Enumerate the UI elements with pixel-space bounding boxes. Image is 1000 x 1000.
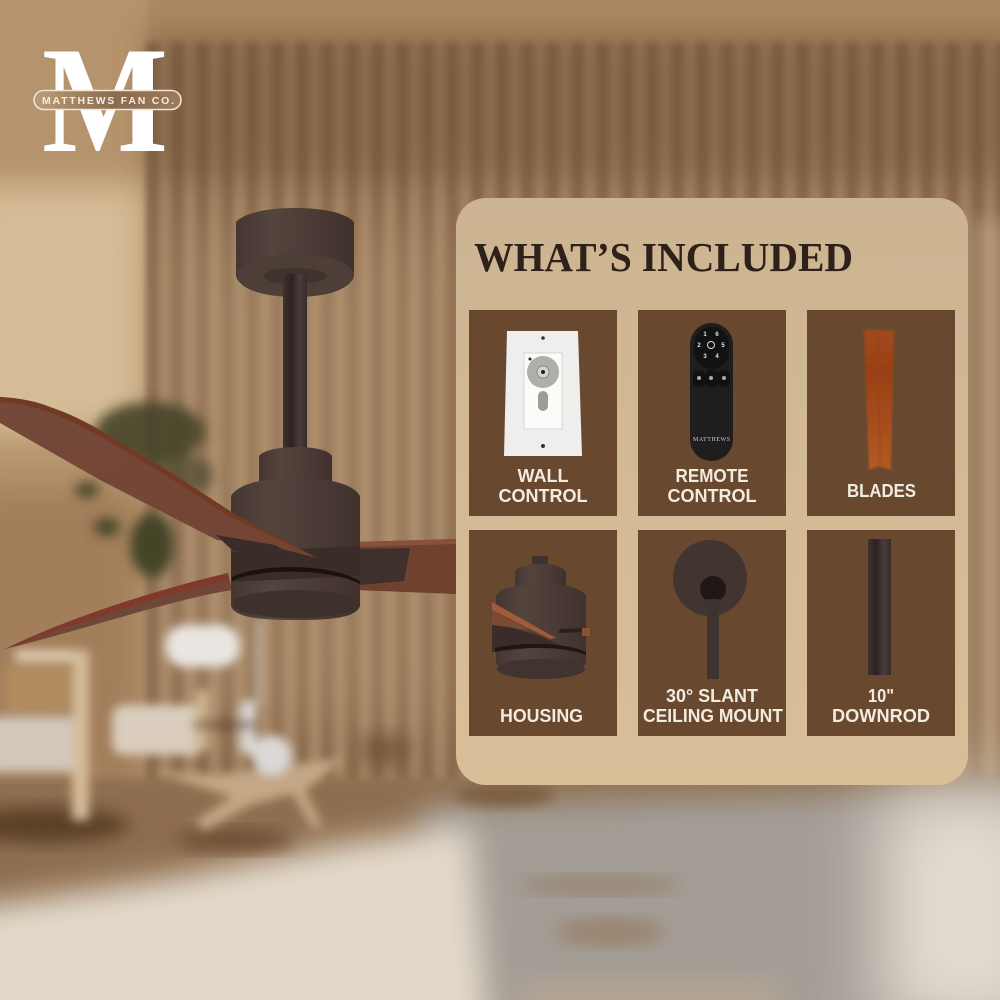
card: wall control bbox=[469, 310, 617, 516]
card: remote control bbox=[638, 310, 786, 516]
card: remote control: CONTROL bbox=[668, 486, 756, 506]
icon: remote bbox=[690, 323, 733, 461]
icon: remote: 3 bbox=[703, 354, 707, 360]
heading: WHAT’S INCLUDED bbox=[474, 234, 853, 280]
label: 10" bbox=[868, 686, 894, 706]
icon: remote: 5 bbox=[721, 343, 725, 349]
label: 30° SLANT bbox=[666, 686, 758, 706]
fan blade: right bbox=[355, 539, 456, 594]
icon: remote: 2 bbox=[697, 343, 701, 349]
icon: blade bbox=[864, 330, 894, 470]
card: housing bbox=[469, 530, 617, 736]
label: WALL bbox=[518, 466, 568, 486]
floor and rug bbox=[0, 778, 1000, 1000]
fan: ceiling fan product photo bbox=[0, 208, 456, 649]
canopy bbox=[236, 208, 354, 297]
label: BLADES bbox=[847, 481, 916, 501]
card: downrod: DOWNROD bbox=[832, 706, 930, 726]
icon: remote: 6 bbox=[715, 332, 719, 338]
card: ceiling mount: CEILING MOUNT bbox=[643, 706, 783, 726]
downrod bbox=[283, 274, 307, 448]
fan blade: rear lower left bbox=[5, 573, 232, 649]
plant bbox=[75, 402, 213, 577]
logo: Matthews Fan Co.: MATTHEWS FAN CO. bbox=[42, 95, 174, 107]
icon: remote: MATTHEWS bbox=[693, 437, 730, 443]
card: blades bbox=[807, 310, 955, 516]
fan blade: front left bbox=[0, 397, 317, 563]
card: ceiling mount bbox=[638, 530, 786, 736]
icon: remote: 1 bbox=[703, 332, 707, 338]
icon: downrod bbox=[868, 539, 891, 675]
card: downrod bbox=[807, 530, 955, 736]
logo: Matthews Fan Co.: M bbox=[42, 16, 168, 184]
icon: slant mount bbox=[673, 540, 747, 679]
side table and stool bbox=[112, 620, 345, 830]
label: REMOTE bbox=[676, 466, 748, 486]
card: wall control: CONTROL bbox=[498, 486, 588, 506]
panel: what's included bbox=[456, 198, 968, 785]
motor housing bbox=[231, 447, 360, 620]
icon: housing bbox=[492, 556, 590, 679]
chair bbox=[0, 650, 89, 820]
icon: remote: 4 bbox=[715, 354, 719, 360]
icon: wall control bbox=[504, 331, 582, 456]
label: HOUSING bbox=[500, 706, 583, 726]
